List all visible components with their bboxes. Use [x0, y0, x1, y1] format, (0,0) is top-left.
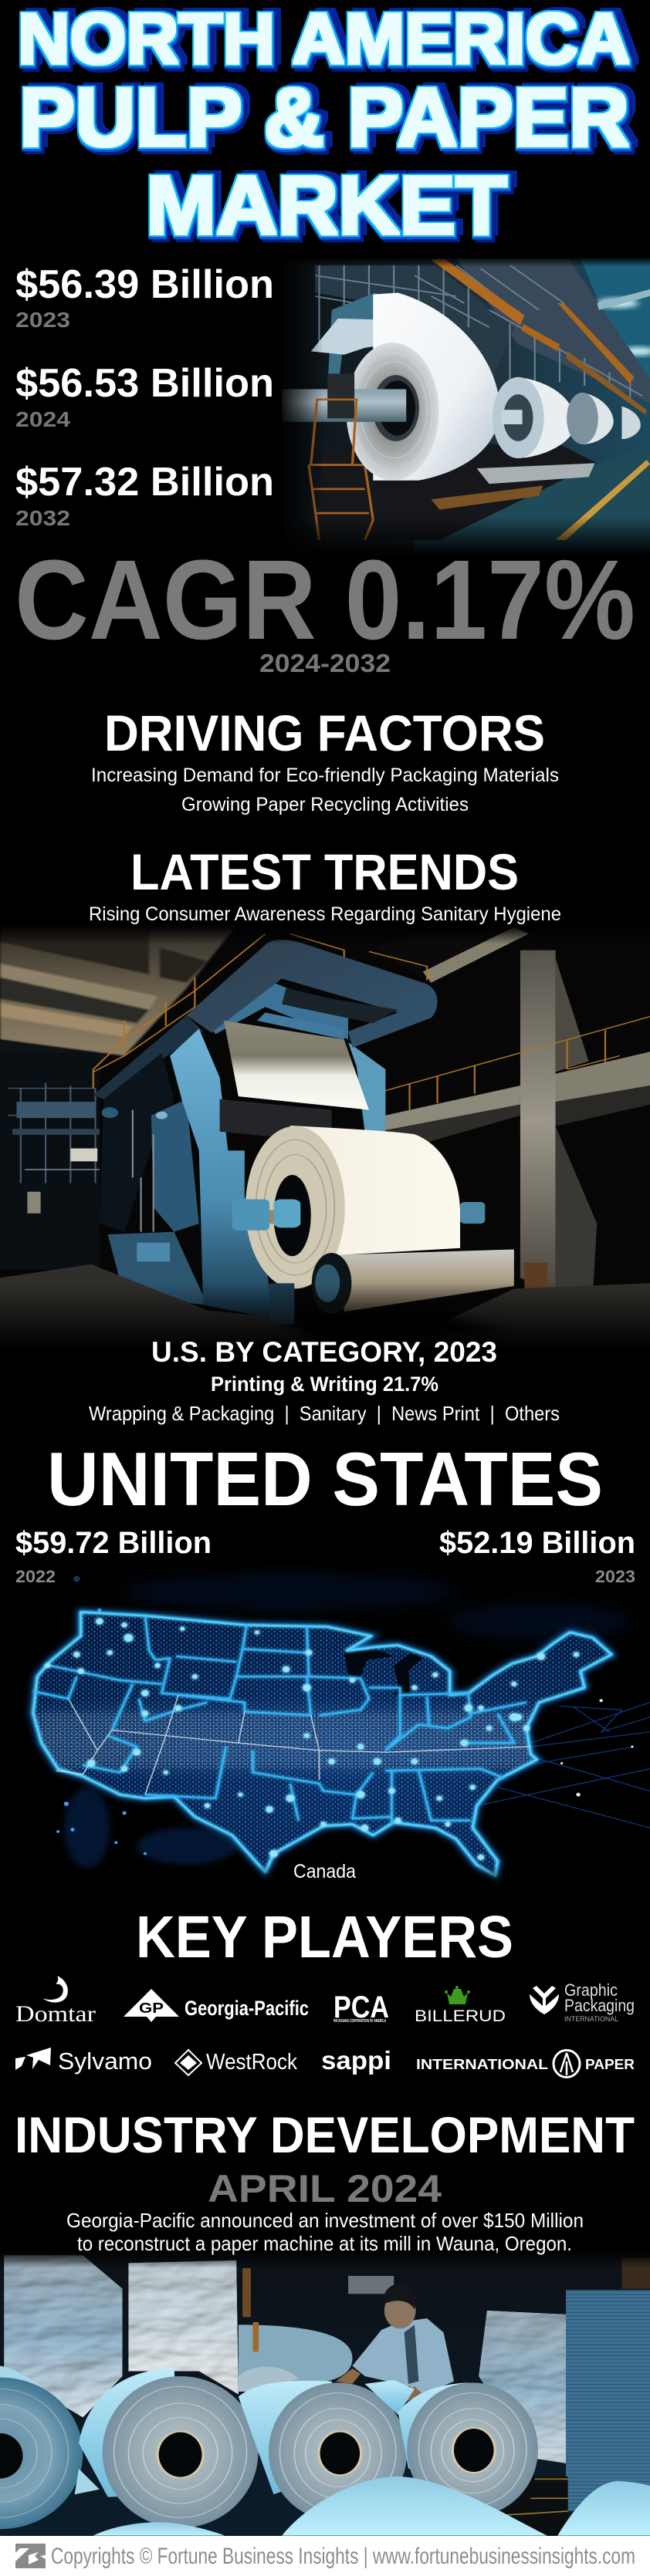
- stat: 2032 value: [15, 460, 274, 530]
- title: PULP & PAPER: [19, 70, 629, 164]
- driving factors text: Growing Paper Recycling Activities: [181, 794, 469, 815]
- united states heading: UNITED STATES: [47, 1437, 603, 1521]
- logo: Graphic Packaging: [530, 1980, 635, 2023]
- title: MARKET: [146, 158, 507, 252]
- logo: Billerud: BILLERUD: [415, 2007, 506, 2025]
- stat: 2023 value: $56.39 Billion: [15, 262, 274, 307]
- logos: [15, 1976, 635, 2077]
- machine left side: [25, 1015, 207, 1305]
- driving factors heading: DRIVING FACTORS: [104, 704, 545, 761]
- other categories: Wrapping & Packaging | Sanitary | News Print | Others: [89, 1402, 560, 1425]
- logo: Georgia-Pacific: [124, 1989, 309, 2022]
- logo: PCA: PACKAGING CORPORATION OF AMERICA: [333, 2019, 386, 2024]
- logo: International Paper: [416, 2051, 635, 2077]
- logo: Graphic Packaging: Graphic: [564, 1980, 618, 2000]
- footer: [0, 2536, 650, 2576]
- US 2022 value: 2022: [15, 1567, 56, 1586]
- logo: Domtar: [15, 1976, 96, 2027]
- stat: 2032 value: $57.32 Billion: [15, 460, 274, 505]
- worker: [336, 2284, 454, 2409]
- logo: International Paper: INTERNATIONAL: [416, 2057, 548, 2072]
- machine frame: [170, 1028, 273, 1318]
- market values: [15, 262, 274, 530]
- US 2022 value: [15, 1526, 212, 1586]
- title: [18, 0, 630, 252]
- title: NORTH AMERICA: [18, 0, 630, 79]
- logo: Graphic Packaging: Packaging: [564, 1996, 635, 2015]
- logo: WestRock: WestRock: [206, 2050, 297, 2075]
- stat: 2024 value: $56.53 Billion: [15, 361, 274, 406]
- driving factors text: Increasing Demand for Eco-friendly Packaging Materials: [91, 765, 559, 786]
- stat: 2024 value: [15, 361, 274, 431]
- image: illuminated US map: [0, 1573, 650, 1890]
- logo: Domtar: Domtar: [15, 2001, 96, 2027]
- logo: Georgia-Pacific: GP: [139, 2000, 164, 2016]
- development date: APRIL 2024: [208, 2167, 442, 2210]
- image: paper machine: [0, 925, 650, 1349]
- logo: Georgia-Pacific: Georgia-Pacific: [185, 1997, 309, 2020]
- stat: 2024 value: 2024: [15, 407, 70, 431]
- development text: [66, 2209, 584, 2255]
- US 2023 value: 2023: [595, 1567, 635, 1586]
- image: paper rolls in factory: [278, 257, 650, 555]
- paper rolls: [0, 2366, 568, 2536]
- development text: to reconstruct a paper machine at its mill in Wauna, Oregon.: [77, 2232, 572, 2255]
- US 2023 value: [439, 1526, 635, 1586]
- latest trends heading: LATEST TRENDS: [130, 843, 519, 900]
- key players heading: KEY PLAYERS: [136, 1904, 513, 1970]
- footer logo: [15, 2544, 46, 2568]
- US 2022 value: $59.72 Billion: [15, 1526, 212, 1560]
- image: worker with paper rolls: [0, 2250, 650, 2536]
- latest trends text: Rising Consumer Awareness Regarding Sanitary Hygiene: [89, 903, 561, 925]
- logo: sappi: sappi: [321, 2046, 391, 2075]
- Canada label: Canada: [293, 1861, 356, 1882]
- development text: Georgia-Pacific announced an investment of over $150 Million: [66, 2209, 584, 2232]
- logo: Billerud: [415, 1986, 506, 2025]
- stat: 2023 value: [15, 262, 274, 332]
- US 2023 value: $52.19 Billion: [439, 1526, 635, 1560]
- logo: International Paper: PAPER: [585, 2057, 635, 2072]
- logo: WestRock: [175, 2050, 297, 2075]
- category heading: U.S. BY CATEGORY, 2023: [151, 1336, 497, 1368]
- stat: 2023 value: 2023: [15, 308, 70, 332]
- logo: Sylvamo: Sylvamo: [58, 2048, 152, 2075]
- logo: Graphic Packaging: INTERNATIONAL: [564, 2015, 618, 2023]
- logo: Sylvamo: [15, 2048, 152, 2075]
- stat: 2032 value: 2032: [15, 506, 70, 530]
- logo: PCA: PCA: [333, 1990, 389, 2024]
- leading category: Printing & Writing 21.7%: [211, 1372, 438, 1396]
- driving factors text: [91, 765, 559, 815]
- CAGR period: 2024-2032: [259, 649, 391, 677]
